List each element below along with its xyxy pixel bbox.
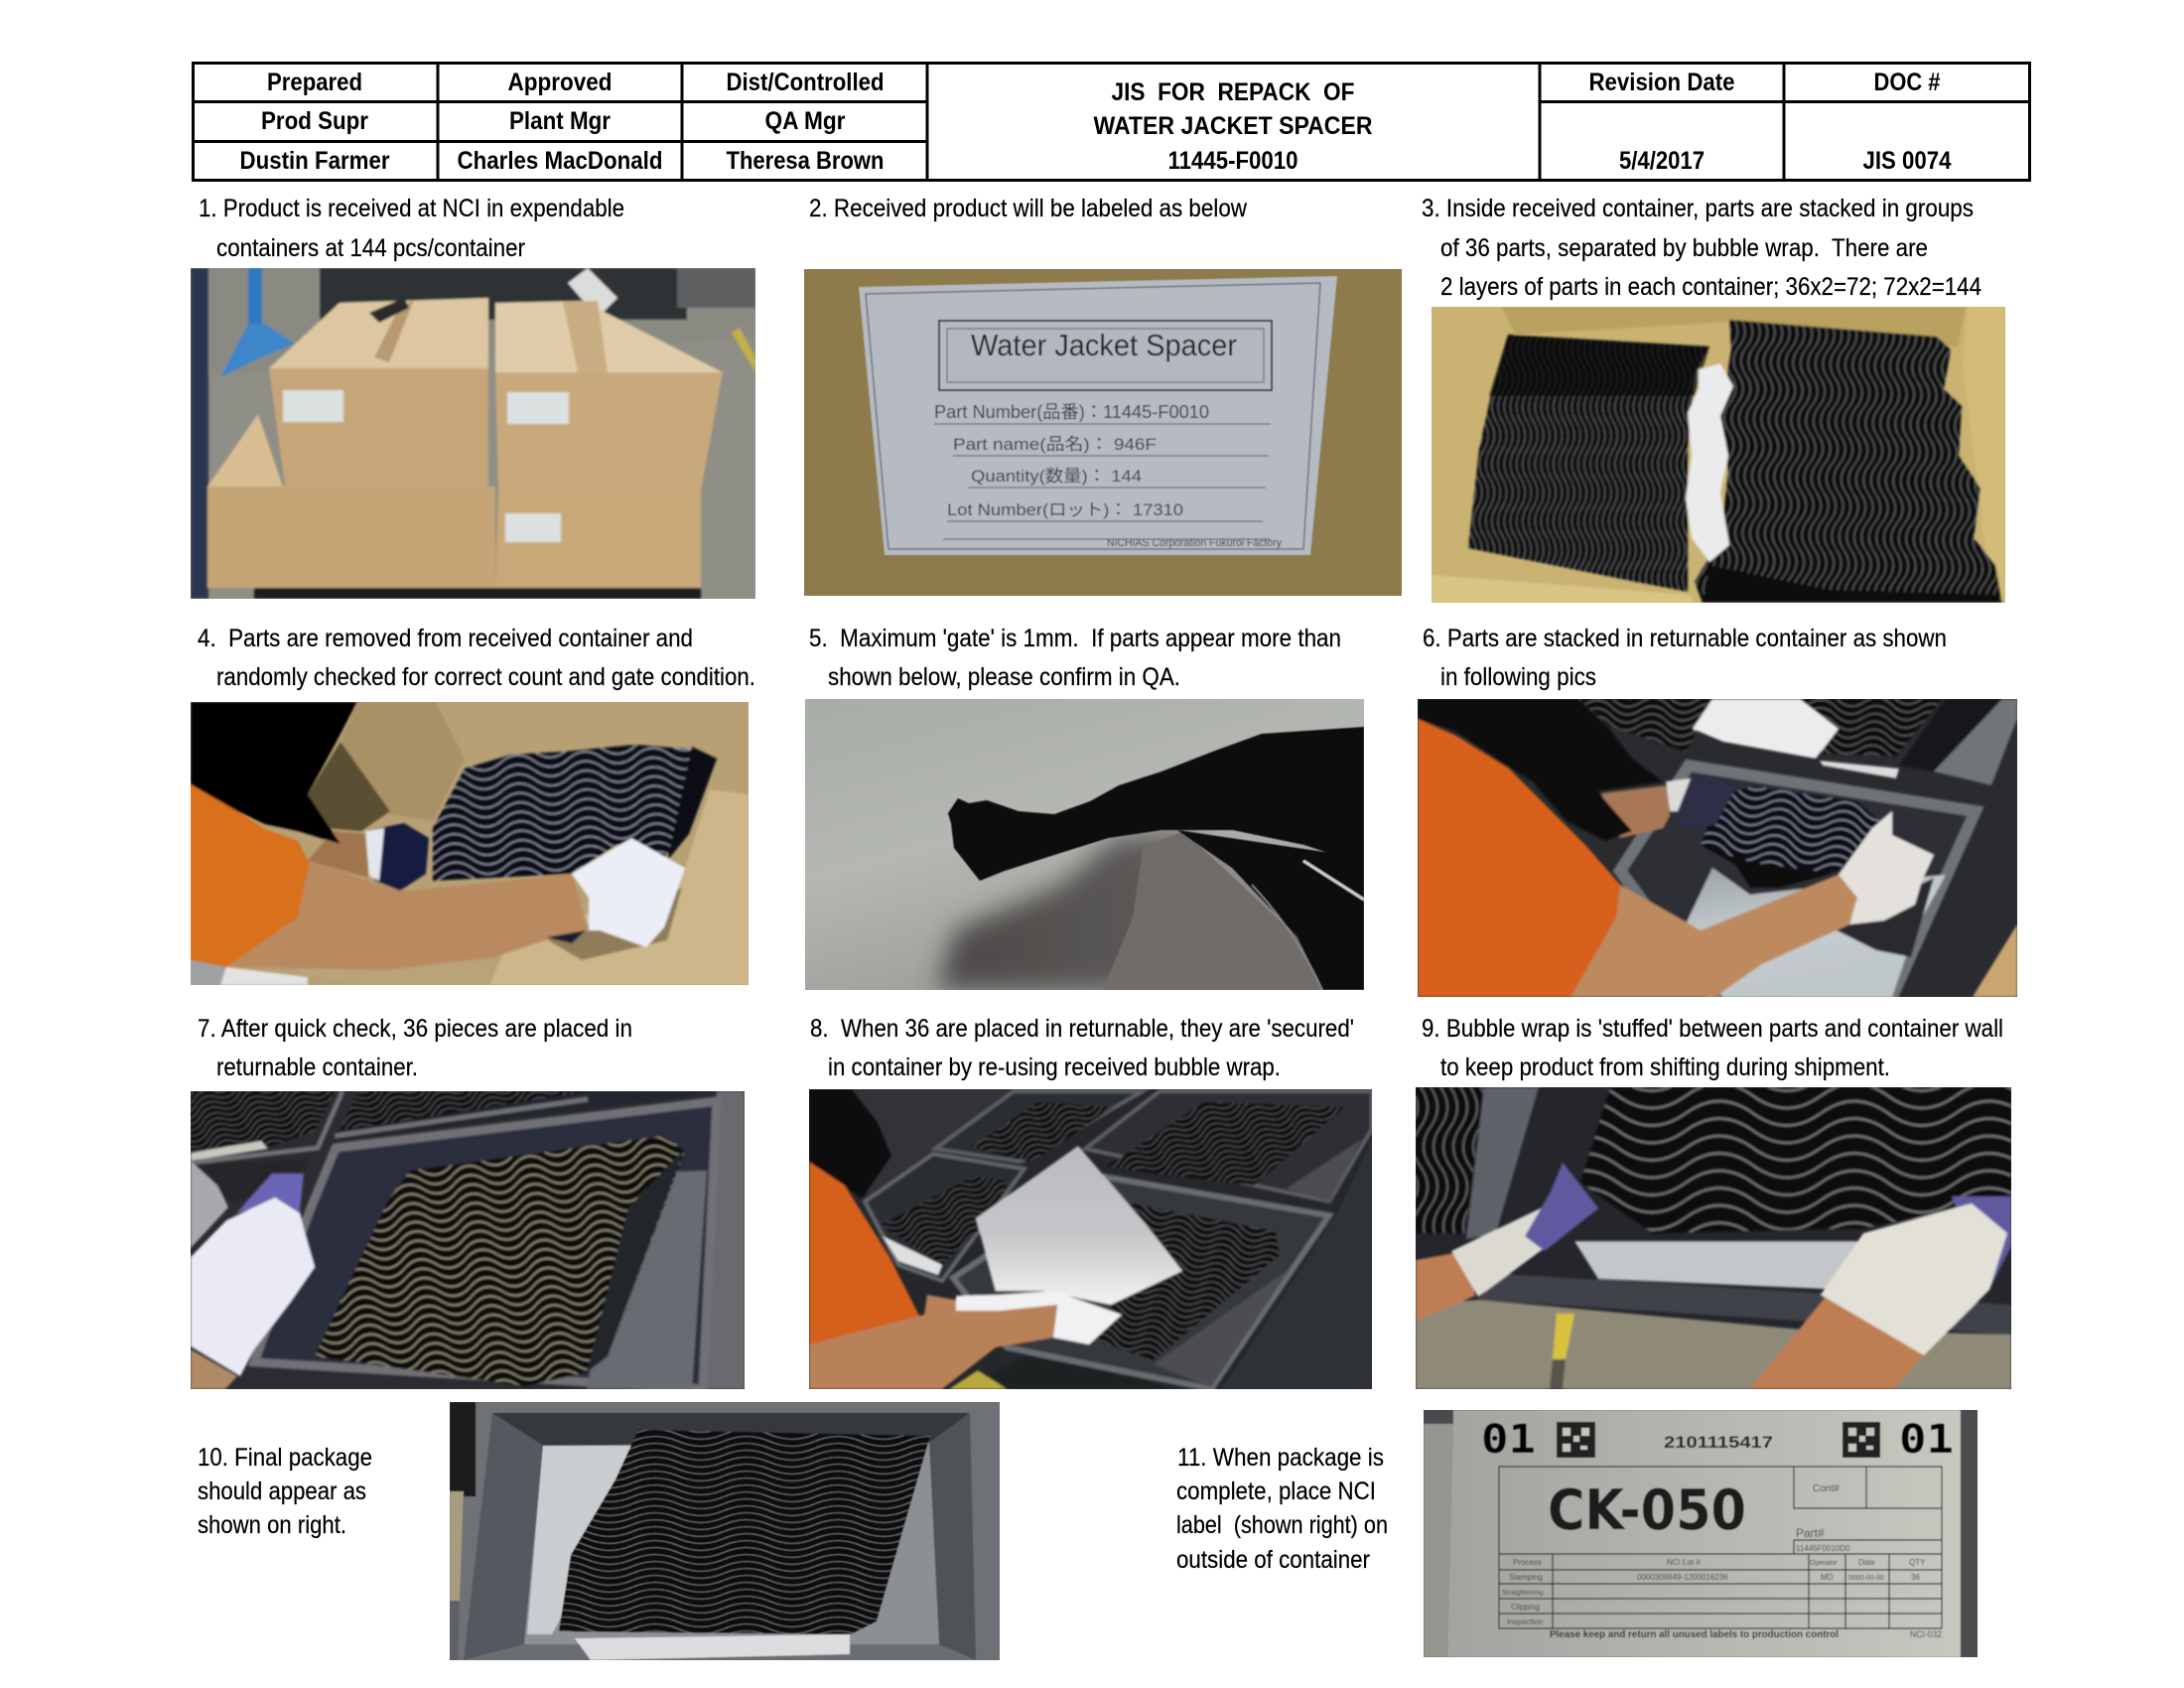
step 3 text: of 36 parts, separated by bubble wrap. There are <box>1440 234 1928 262</box>
photo: final package in container <box>450 1402 1000 1660</box>
step 9 text: to keep product from shifting during shipment. <box>1440 1054 1890 1081</box>
header: distribution column <box>727 69 884 175</box>
form text: 0000309949-1200016236 <box>1637 1573 1728 1582</box>
step 5 panel <box>805 625 1364 990</box>
lane number left: 01 <box>1481 1417 1536 1463</box>
upper right container <box>1085 1091 1372 1201</box>
container walls <box>464 1413 976 1660</box>
step 6 text: in following pics <box>1440 663 1596 691</box>
photo: product label on box: Lot Number(ロット)： 17310 <box>947 500 1183 519</box>
header: prepared column: Prepared <box>267 69 362 96</box>
step 9 panel <box>1416 1015 2011 1389</box>
step 5 text: 5. Maximum 'gate' is 1mm. If parts appear more than <box>809 625 1341 652</box>
right glove <box>546 838 685 947</box>
main parts stack <box>1096 1203 1280 1360</box>
step 3 panel <box>1422 195 2005 603</box>
photo: bubble wrap stuffed beside parts <box>1416 1087 2011 1389</box>
bubble wrap <box>575 1634 850 1660</box>
photo: NCI container label <box>1424 1410 1978 1657</box>
glove <box>191 1174 315 1389</box>
container floor <box>524 1443 939 1644</box>
container floor <box>1686 868 1946 997</box>
bubble wrap <box>191 1161 228 1248</box>
step 4 text: 4. Parts are removed from received container and <box>198 625 693 652</box>
step 3 text <box>1422 195 1981 301</box>
photo: product label on box: NICHIAS Corporation Fukuroi Factory <box>1107 537 1282 549</box>
revision date: Revision Date <box>1588 69 1735 96</box>
photo: close-up of part gate <box>805 699 1364 990</box>
title: JIS FOR REPACK OF <box>1112 78 1354 106</box>
step 6 text: 6. Parts are stacked in returnable container as shown <box>1423 625 1947 652</box>
header: prepared column: Prod Supr <box>261 107 368 135</box>
step 8 text: 8. When 36 are placed in returnable, they are 'secured' <box>810 1015 1354 1043</box>
hair <box>809 1089 891 1198</box>
part code: CK-050 <box>1548 1478 1746 1543</box>
header: approved column: Approved <box>508 69 612 96</box>
header: distribution column: Dist/Controlled <box>727 69 884 96</box>
step 11 panel <box>1176 1410 1978 1657</box>
form text: Operator <box>1810 1560 1838 1567</box>
bubble wrap <box>1693 699 1899 778</box>
step 3 text: 2 layers of parts in each container; 36x2=72; 72x2=144 <box>1440 273 1981 301</box>
shirt <box>191 784 310 967</box>
box: bottom left <box>207 414 495 588</box>
step 10 text: 10. Final package <box>198 1444 372 1472</box>
step 1 text <box>199 195 624 262</box>
photo: worker stacking parts in returnable container <box>1418 699 2017 997</box>
parts stack <box>559 1430 930 1634</box>
step 11 text: 11. When package is <box>1177 1444 1384 1472</box>
form text: Inspection <box>1507 1618 1543 1626</box>
container floor <box>587 1171 707 1389</box>
step 6 text <box>1423 625 1947 691</box>
photo: product label on box: Part Number(品番)：11445-F0010 <box>934 402 1209 422</box>
gloves <box>1666 776 1934 924</box>
form text: 11445F0010D0 <box>1796 1544 1850 1553</box>
label paper <box>1447 1410 1961 1657</box>
floor marking <box>949 1370 1007 1389</box>
arm <box>1570 875 1857 997</box>
title: 11445-F0010 <box>1167 147 1298 175</box>
step 7 text: 7. After quick check, 36 pieces are placed in <box>198 1015 632 1043</box>
document header table <box>193 63 2029 181</box>
step 7 panel <box>191 1015 745 1389</box>
hair <box>191 702 357 844</box>
header: approved column: Plant Mgr <box>509 107 611 135</box>
black right zone <box>1177 830 1364 990</box>
left stack of parts <box>1468 335 1709 592</box>
photo: 36 pieces placed in returnable container <box>191 1091 745 1389</box>
document number: JIS 0074 <box>1862 147 1952 175</box>
form text: MD <box>1821 1573 1834 1582</box>
cardboard <box>1973 924 2017 997</box>
form text: QTY <box>1909 1558 1926 1567</box>
part silhouette with gate <box>948 727 1364 881</box>
title: WATER JACKET SPACER <box>1094 112 1372 140</box>
label form grid <box>1499 1467 1942 1628</box>
step 11 text <box>1176 1444 1388 1574</box>
revision date <box>1588 69 1735 175</box>
document number: DOC # <box>1874 69 1941 96</box>
step 10 text: should appear as <box>198 1477 366 1505</box>
pallet <box>254 588 701 599</box>
form text: Clipping <box>1511 1603 1540 1612</box>
step 4 text: randomly checked for correct count and gate condition. <box>216 663 755 691</box>
main container <box>953 1177 1329 1389</box>
header: distribution column: Theresa Brown <box>727 147 884 175</box>
step 5 text <box>809 625 1341 691</box>
form text: 36 <box>1911 1573 1920 1582</box>
upper centre container <box>935 1091 1143 1162</box>
bubble wrap <box>1574 1241 1857 1290</box>
step 4 panel <box>191 625 755 985</box>
form text: Stamping <box>1509 1573 1543 1582</box>
bubble wrap divider <box>1686 363 1733 562</box>
shirt <box>1418 719 1620 997</box>
step 1 panel <box>191 195 755 599</box>
floor <box>1416 1300 2011 1389</box>
step 5 text: shown below, please confirm in QA. <box>828 663 1180 691</box>
wrist <box>1601 785 1670 838</box>
QR code left <box>1557 1422 1595 1458</box>
photo: stacked cardboard boxes on pallet <box>191 268 755 599</box>
photo: worker checking parts <box>191 702 749 985</box>
box: bottom right <box>495 491 701 590</box>
form text <box>1502 1483 1926 1626</box>
step 11 text: label (shown right) on <box>1176 1511 1388 1539</box>
arms <box>1416 1251 1924 1389</box>
step 2 panel <box>804 195 1402 596</box>
right glove <box>1821 1196 2011 1355</box>
shirt <box>809 1162 920 1344</box>
bubble wrap <box>976 1146 1182 1305</box>
step 10 text <box>198 1444 372 1539</box>
lane number right: 01 <box>1899 1417 1954 1463</box>
header: approved column: Charles MacDonald <box>457 147 663 175</box>
step 7 text <box>198 1015 632 1081</box>
parts stack <box>315 1136 685 1386</box>
wrist <box>308 831 368 878</box>
header: approved column <box>457 69 663 175</box>
step 8 text <box>810 1015 1354 1081</box>
step 6 panel <box>1418 625 2017 997</box>
shadow fan <box>937 831 1322 990</box>
form text: Process <box>1513 1558 1542 1567</box>
box: top left <box>269 298 488 487</box>
photo: product label on box: Quantity(数量)： 144 <box>971 467 1142 486</box>
parts held <box>1701 786 1880 888</box>
photo: product label on box: Water Jacket Spacer <box>971 328 1237 362</box>
right container edge <box>697 1091 745 1389</box>
header: distribution column: QA Mgr <box>764 107 846 135</box>
paper label <box>859 276 1337 555</box>
form text: NCI Lot # <box>1667 1558 1701 1567</box>
left glove <box>365 823 429 891</box>
step 1 text: containers at 144 pcs/container <box>216 234 525 262</box>
floor marking <box>1550 1314 1574 1389</box>
form text: 0000-00-00 <box>1848 1575 1884 1582</box>
main wave stack <box>1580 1087 2011 1233</box>
box: top right <box>495 301 723 491</box>
step 9 text <box>1422 1015 2003 1081</box>
return note: NCI-032 <box>1910 1629 1942 1639</box>
return note: Please keep and return all unused labels to production control <box>1550 1629 1839 1640</box>
revision date: 5/4/2017 <box>1619 147 1705 175</box>
arm <box>809 1295 1057 1389</box>
step 2 text: 2. Received product will be labeled as below <box>809 195 1248 222</box>
form text: Straightening <box>1502 1590 1543 1597</box>
container lower rim <box>1478 1274 2011 1335</box>
photo: product label on box: Part name(品名)： 946F <box>953 435 1157 454</box>
step 9 text: 9. Bubble wrap is 'stuffed' between parts and container wall <box>1422 1015 2003 1043</box>
photo: product label on box <box>804 269 1402 596</box>
label serial: 2101115417 <box>1664 1433 1773 1452</box>
step 8 panel <box>809 1015 1372 1389</box>
photo: parts stacked in received container <box>1432 307 2005 603</box>
container rim and interior <box>1620 766 1976 997</box>
right stack of parts <box>1695 320 2002 603</box>
dark stacked crates at right <box>1222 1139 1372 1389</box>
step 10 panel <box>198 1402 1000 1660</box>
document number <box>1862 69 1952 175</box>
header: prepared column: Dustin Farmer <box>240 147 390 175</box>
left lower container <box>865 1154 1024 1281</box>
title <box>1094 78 1372 175</box>
container <box>254 1101 717 1389</box>
step 4 text <box>198 625 755 691</box>
photo: securing parts with bubble wrap <box>809 1089 1372 1389</box>
form text: Cont# <box>1813 1483 1840 1494</box>
step 3 text: 3. Inside received container, parts are stacked in groups <box>1422 195 1974 222</box>
step 11 text: outside of container <box>1176 1546 1370 1574</box>
gloves <box>956 1291 1122 1344</box>
header: prepared column <box>240 69 390 175</box>
form text: Part# <box>1796 1526 1825 1540</box>
step 7 text: returnable container. <box>216 1054 418 1081</box>
step 8 text: in container by re-using received bubble wrap. <box>828 1054 1281 1081</box>
step 1 text: 1. Product is received at NCI in expendable <box>199 195 624 222</box>
box labels <box>283 390 569 542</box>
arm <box>226 861 589 970</box>
left glove <box>1451 1163 1598 1297</box>
step 11 text: complete, place NCI <box>1176 1477 1376 1505</box>
step 10 text: shown on right. <box>198 1511 346 1539</box>
parts stack <box>433 745 717 881</box>
hair <box>1418 699 1663 841</box>
form text: Date <box>1858 1558 1875 1567</box>
QR code right <box>1843 1422 1880 1458</box>
